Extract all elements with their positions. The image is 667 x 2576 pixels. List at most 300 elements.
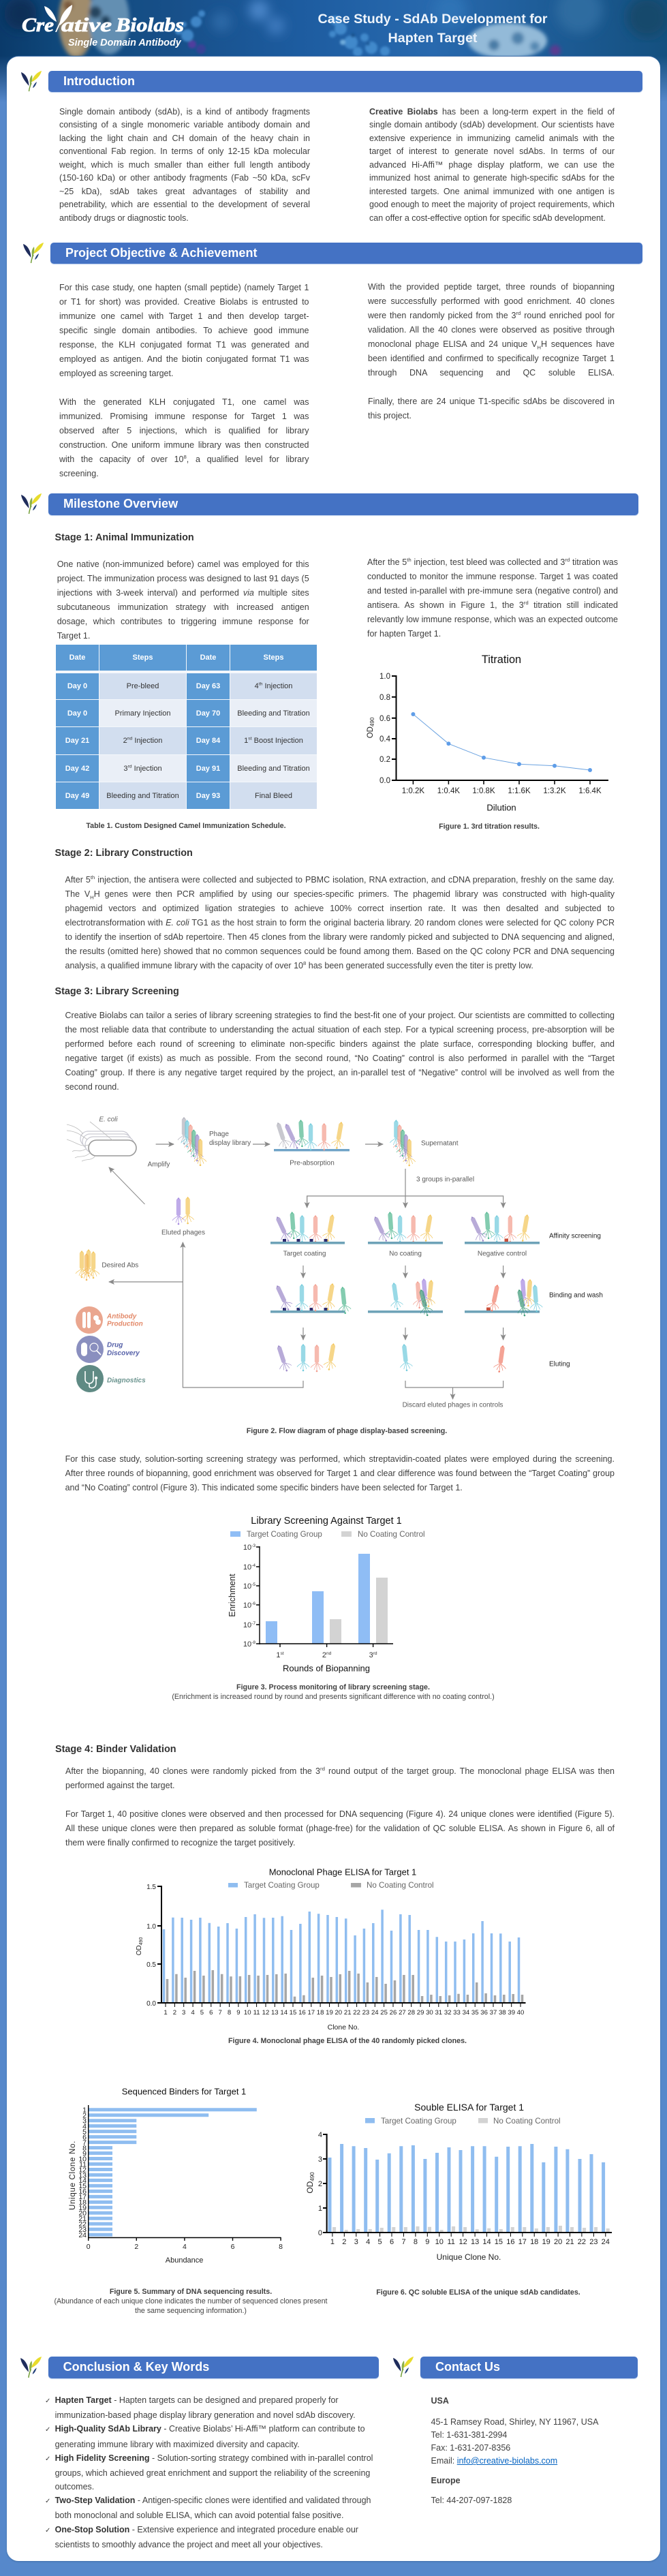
main title: Case Study - SdAb Development for [318,12,547,27]
chart: soluble ELISA: 13 [471,2238,479,2246]
text: objective left: specific single domain antibodies. To achieve good immune [59,326,309,335]
chart: soluble ELISA: 11 [447,2238,455,2246]
chart: monoclonal phage ELISA: 15 [290,2009,296,2017]
text: stage 1 left: dosage, which contributes to triggering immune response for [57,616,309,626]
text: contact details: Email: info@creative-biolabs.com [431,2456,557,2466]
chart: library screening enrichment: Target Coating Group [247,1530,322,1539]
text: introduction right: Creative Biolabs has been a long-term expert in the field of [369,107,615,117]
chart: titration line: 0.4 [379,735,391,743]
text: objective left: response, the KLH conjugated format T1 was generated and [59,339,309,349]
text: introduction left: lacking the light chain and CH domain of the heavy chain in [59,134,310,143]
chart: soluble ELISA: OD [305,2181,315,2194]
chart: sequenced binders: 13 [78,2171,87,2179]
heading: Contact Us: Contact Us [435,2360,500,2374]
table: immunization schedule: Day 21 [65,737,89,745]
chart: sequenced binders: 21 [78,2215,87,2223]
chart: monoclonal phage ELISA: 25 [380,2009,388,2017]
chart: monoclonal phage ELISA: 18 [317,2009,324,2017]
table: immunization schedule [56,645,317,809]
chart: monoclonal phage ELISA: 4 [191,2009,195,2017]
chart: soluble ELISA: 1 [318,2205,322,2213]
label: Phage display library: display library [209,1139,251,1147]
arrows: to binding and wash [303,1266,503,1278]
table: immunization schedule: 2nd Injection [123,736,162,745]
heading: Stage 4: Stage 4: Binder Validation [55,1744,176,1755]
heading: Milestone Overview: Milestone Overview [63,497,178,510]
phage stack: supernatant [390,1120,416,1166]
row: affinity screening plates [270,1211,540,1244]
text: introduction right: can offer a cost-effective option for specific sdAb development. [369,213,606,223]
table: immunization schedule: Date [69,654,85,662]
chart: monoclonal phage ELISA: 8 [228,2009,231,2017]
chart: soluble ELISA: 9 [425,2238,429,2246]
text: stage 1 right: conducted to monitor the immune response. Target 1 was coated [367,571,618,581]
chart: sequenced binders: 12 [78,2166,87,2174]
chart: soluble ELISA: 16 [506,2238,515,2246]
logo wordmark: ative [61,15,112,36]
logo wordmark: Cre [22,15,54,36]
labels: coating groups: Negative control [478,1250,527,1258]
text: objective right: were then randomly picked from the 3rd round enriched pool for [368,309,615,320]
chart: sequenced binders: 15 [78,2182,87,2190]
chart: monoclonal phage ELISA: 5 [200,2009,204,2017]
chart: titration line: 0.8 [379,694,390,702]
chart: soluble ELISA: 20 [554,2238,562,2246]
row: eluted phages by group [273,1342,509,1373]
list: conclusion key words: outcomes. [55,2482,94,2491]
chart: library screening enrichment: -6 [251,1601,255,1606]
chart: monoclonal phage ELISA: 38 [499,2009,506,2017]
text: objective right: through DNA sequencing and QC soluble ELISA. [368,368,615,378]
text: solution sorting: and “No Coating” control (Figure 3). This indicated some specific binders have been selected for Target 1. [65,1483,463,1492]
chart: monoclonal phage ELISA: 39 [508,2009,515,2017]
list: conclusion key words: High Fidelity Screening - Solution-sorting strategy combined with in-parallel control [55,2453,373,2463]
chart: monoclonal phage ELISA: 27 [399,2009,406,2017]
icon: leaf milestone [21,493,42,514]
chart: sequenced binders: 7 [82,2138,87,2147]
chart: titration line: 0.0 [379,777,390,785]
text: objective right: Finally, there are 24 unique T1-specific sdAbs be discovered in [368,397,615,406]
chart: monoclonal phage ELISA: 19 [326,2009,333,2017]
table: immunization schedule: Bleeding and Titration [237,709,310,717]
chart: soluble ELISA: 21 [565,2238,574,2246]
text: stage 4: them were finally confirmed to recognize the target positively. [65,1837,295,1847]
text: objective left: employed as antigen. And the biotin conjugated format T1 was [59,354,309,364]
chart: library screening enrichment: Enrichment [228,1574,237,1617]
chart: sequenced binders: 22 [78,2220,87,2228]
table: immunization schedule: Steps [264,654,283,662]
table: immunization schedule: Bleeding and Titration [237,765,310,773]
list: conclusion key words: ✓ [45,2426,50,2434]
text: objective left [59,282,309,478]
text: stage 3 [65,1010,615,1092]
text: stage 4: After the biopanning, 40 clones were randomly picked from the 3rd round output of the target group. The monoclonal phage ELISA was then [65,1765,615,1776]
text: objective left: or T1 for short) was provided. Creative Biolabs is entrusted to [59,297,309,307]
text: introduction left: antibody drugs or diagnostic tools. [59,213,189,223]
arrow: back to E. coli [109,1167,144,1204]
chart: library screening enrichment: 10 [243,1563,251,1571]
chart: monoclonal phage ELISA: 26 [390,2009,397,2017]
chart: monoclonal phage ELISA: 0.0 [146,2000,156,2008]
chart: soluble ELISA: 12 [459,2238,467,2246]
chart: monoclonal phage ELISA: 29 [417,2009,424,2017]
list: conclusion key words: both monoclonal and soluble ELISA, which can avoid potential false positive. [55,2511,343,2520]
chart: monoclonal phage ELISA: 490 [139,1937,144,1945]
text: stage 4: For Target 1, 40 positive clones were observed and then processed for DNA sequencing (Figure 4). 24 unique clones were identified (Figure 5). [65,1809,615,1818]
chart: monoclonal phage ELISA [136,1867,526,2031]
caption: figure 5: the same sequencing information.) [135,2307,247,2315]
text: introduction left: conventional Fab region. In terms of only 12-15 kDa molecular [59,147,310,156]
text: objective left: construction. One uniform immune library was then constructed [59,440,309,450]
text: objective right [368,282,615,420]
chart: library screening enrichment: nd [326,1651,332,1656]
chart: monoclonal phage ELISA: 10 [244,2009,251,2017]
chart: soluble ELISA: 10 [435,2238,444,2246]
chart: sequenced binders: 3 [82,2117,87,2125]
logo wordmark: Biolabs [115,15,184,36]
chart: library screening enrichment: -3 [251,1544,255,1548]
list: conclusion key words: One-Stop Solution - Extensive experience and integrated procedure enable our [55,2525,358,2534]
caption: table 1: Table 1. Custom Designed Camel Immunization Schedule. [86,822,286,830]
chart: sequenced binders: 24 [78,2231,87,2239]
chart: monoclonal phage ELISA: 9 [236,2009,241,2017]
heading: Project Objective & Achievement: Project Objective & Achievement [65,246,257,260]
chart: titration line [367,654,608,812]
text: introduction left: ~25 kDa), sdAb takes great advantages of stability and [59,187,310,196]
chart: soluble ELISA: 4 [318,2131,322,2139]
chart: monoclonal phage ELISA: 1.0 [146,1923,156,1931]
chart: monoclonal phage ELISA: 32 [444,2009,452,2017]
icon: drug discovery: Discovery [107,1349,140,1358]
chart: soluble ELISA: 0 [318,2229,322,2237]
table: immunization schedule: Day 70 [196,709,220,717]
icon: leaf conclusion [20,2357,42,2378]
text: stage 1 right: After the 5th injection, test bleed was collected and 3rd titration was [367,556,618,567]
chart: sequenced binders: Sequenced Binders for Target 1 [122,2087,246,2096]
caption: figure 6: Figure 6. QC soluble ELISA of the unique sdAb candidates. [376,2288,580,2297]
text: introduction right: target of interest to generate novel sdAbs. In terms of our [369,147,615,156]
chart: monoclonal phage ELISA: 13 [271,2009,279,2017]
icon: antibody production: Antibody [106,1313,137,1321]
chart: titration line: Dilution [486,803,516,812]
chart: monoclonal phage ELISA: No Coating Control [367,1881,434,1890]
heading: Contact Us [420,2357,638,2378]
labels: stage names: Binding and wash [549,1292,603,1299]
chart: library screening enrichment: Rounds of Biopanning [283,1663,370,1674]
chart: library screening enrichment: 3 [369,1651,373,1659]
chart: sequenced binders: 4 [183,2243,187,2251]
labels: stage names: Eluting [549,1360,570,1368]
text: contact details: 45-1 Ramsey Road, Shirley, NY 11967, USA [431,2417,598,2427]
chart: sequenced binders: 2 [134,2243,138,2251]
icon: drug discovery: Drug [107,1341,123,1349]
caption: figure 3: Figure 3. Process monitoring of library screening stage. [236,1683,430,1691]
chart: monoclonal phage ELISA: 0.5 [146,1961,156,1969]
chart: soluble ELISA: Souble ELISA for Target 1 [414,2102,524,2113]
text: objective left: For this case study, one hapten (small peptide) (namely Target 1 [59,282,309,292]
chart: soluble ELISA: 2 [318,2180,322,2188]
table: immunization schedule: Day 91 [196,765,220,773]
icon: drug discovery [76,1336,140,1363]
label: Supernatant: Supernatant [421,1139,459,1148]
text: stage 1 left [57,559,309,641]
chart: soluble ELISA: 1 [330,2238,335,2246]
text: stage 2: After 5th injection, the antisera were collected and subjected to PBMC isolation, RNA extraction, and cDNA preparation, freshly on the same day. [65,874,615,885]
list: conclusion key words: groups, which achieved great enrichment and support the reliability of the screening [55,2468,370,2478]
arrow: to pre-absorption [253,1144,270,1145]
chart: monoclonal phage ELISA: 17 [307,2009,315,2017]
chart: monoclonal phage ELISA: 1.5 [146,1884,156,1891]
logo wordmark [22,15,184,36]
label: Pre-absorption: Pre-absorption [290,1160,335,1167]
chart: sequenced binders: 18 [78,2198,87,2207]
desired antibodies: Desired Abs [102,1262,138,1269]
icon: leaf contact [393,2357,414,2377]
chart: monoclonal phage ELISA: 22 [353,2009,360,2017]
chart: sequenced binders: 11 [79,2160,87,2168]
labels: coating groups: No coating [389,1250,422,1258]
chart: soluble ELISA: 22 [578,2238,586,2246]
text: objective right: been identified and confirmed to specifically recognize Target 1 [368,353,615,363]
chart: sequenced binders: 14 [78,2177,87,2185]
chart: monoclonal phage ELISA: 11 [253,2009,260,2017]
chart: sequenced binders: 16 [78,2188,87,2196]
list: conclusion key words: ✓ [45,2527,50,2534]
text: contact details: Tel: 44-207-097-1828 [431,2496,512,2505]
chart: monoclonal phage ELISA: 33 [453,2009,461,2017]
table: immunization schedule: Pre-bleed [127,682,159,690]
chart: titration line: Titration [482,654,521,666]
table: immunization schedule: Day 63 [196,682,220,690]
text: objective left: immunized. Promising immune response for Target 1 was [59,412,309,421]
labels: coating groups: Target coating [283,1250,326,1258]
table: immunization schedule: Day 84 [196,737,220,745]
chart: library screening enrichment [228,1516,425,1674]
heading: Introduction: Introduction [63,74,135,88]
text: objective left: With the generated KLH conjugated T1, one camel was [59,397,309,406]
chart: monoclonal phage ELISA: 40 [517,2009,524,2017]
chart: soluble ELISA: 17 [518,2238,527,2246]
text: introduction right: extensive experience in immunizing camelid animals with the [369,134,615,143]
caption: figure 1: Figure 1. 3rd titration results. [439,823,540,831]
text: contact details [431,2396,598,2505]
chart: sequenced binders: Abundance [166,2256,203,2265]
chart: soluble ELISA: 18 [530,2238,538,2246]
chart: sequenced binders: 1 [82,2106,87,2114]
chart: soluble ELISA: 4 [366,2238,370,2246]
chart: soluble ELISA: 490 [309,2172,315,2181]
text: objective left: observed after 5 injections, which is qualified for library [59,425,309,435]
text: stage 1 right [367,556,618,638]
chart: soluble ELISA [305,2102,612,2262]
heading: Milestone Overview [48,493,638,515]
chart: titration line: 490 [369,717,375,726]
text: objective left: immunize one camel with Target 1 and then develop target- [59,311,309,320]
text: stage 1 left: One native (non-immunized before) camel was employed for this [57,559,309,568]
chart: monoclonal phage ELISA: 34 [463,2009,470,2017]
chart: titration line: 0.2 [379,756,390,764]
chart: soluble ELISA: 3 [318,2156,322,2164]
list: conclusion key words: ✓ [45,2397,50,2405]
chart: sequenced binders: 4 [82,2122,87,2130]
flow diagram: phage display screening [67,1116,603,1409]
arrows: to eluting [303,1328,503,1340]
text: solution sorting: After three rounds of biopanning, good enrichment was observed for Target 1 and clear difference was found between the “Target Coating” group [65,1468,615,1477]
caption: figure 5: (Abundance of each unique clone indicates the number of sequenced clones present [54,2297,328,2305]
icon: diagnostics [76,1365,146,1392]
heading: Project Objective & Achievement [50,243,642,264]
row: binding and wash plates [270,1278,543,1317]
chart: sequenced binders [69,2087,283,2265]
text: objective right: validation. All the 40 clones were observed as positive through [368,324,615,334]
text: stage 1 left: Target 1. [57,631,90,641]
icon: E. coli cell: E. coli [99,1116,118,1123]
chart: sequenced binders: 5 [82,2128,87,2136]
table: immunization schedule: Day 0 [67,682,87,690]
text: stage 1 left: project. The immunization process was designed to last 91 days (5 [57,574,309,583]
chart: monoclonal phage ELISA: 1 [164,2009,168,2017]
icon: diagnostics: Diagnostics [107,1377,146,1385]
chart: library screening enrichment: No Coating Control [358,1530,425,1539]
table: immunization schedule: Day 93 [196,792,220,800]
table: immunization schedule: 3rd Injection [123,764,162,773]
icon: antibody production: Production [107,1321,143,1328]
header banner background [0,0,667,98]
chart: titration line: 0.6 [379,715,390,723]
chart: monoclonal phage ELISA: Target Coating Group [244,1881,320,1890]
chart: library screening enrichment: 2 [322,1651,326,1659]
chart: library screening enrichment: rd [373,1651,377,1656]
labels: stage names [549,1232,603,1368]
chart: monoclonal phage ELISA: 3 [182,2009,185,2017]
chart: monoclonal phage ELISA: 14 [280,2009,288,2017]
chart: library screening enrichment: -8 [251,1640,255,1645]
text: objective left: screening. [59,469,99,478]
chart: library screening enrichment: -5 [251,1582,255,1587]
chart: monoclonal phage ELISA: 24 [371,2009,379,2017]
text: introduction left: Single domain antibody (sdAb), is a kind of antibody fragments [59,107,310,117]
text: stage 1 left: subcutaneous immunization strategy with increased antigen [57,602,309,612]
icon: leaf introduction [21,71,42,91]
list: conclusion key words [45,2395,373,2549]
list: conclusion key words: generating immune library with maximized diversity and capacity. [55,2440,300,2449]
chart: soluble ELISA: 15 [495,2238,503,2246]
text: stage 2: electrotransformation with E. coli TG1 as the host strain to form the original bacteria library. 20 random clones were selected for QC colony PCR [65,917,615,927]
arrows: three group branches [307,1169,503,1208]
chart: soluble ELISA: 7 [401,2238,406,2246]
text: stage 3: the most reliable data that contribute to understanding the actual situation of each step. For a typical screening process, pre-absorption will be [65,1025,615,1034]
chart: monoclonal phage ELISA: 37 [490,2009,497,2017]
table: immunization schedule: Primary Injection [115,709,170,717]
main title [318,12,548,46]
text: stage 3: second round. [65,1082,119,1092]
text: contact details: USA [431,2396,449,2406]
arrow: to phage library [156,1144,174,1145]
chart: sequenced binders: 17 [78,2193,87,2201]
text: stage 1 right: and tested in-parallel with pre-immune sera (negative control) and [367,586,618,596]
arrows: eluted feedback lines [109,1242,503,1399]
icon: E. coli cell [67,1116,136,1161]
chart: sequenced binders: 0 [87,2243,91,2251]
text: objective left: employed as screening target. [59,368,173,378]
list: conclusion key words: High-Quality SdAb Library - Creative Biolabs’ Hi-Affi™ platform can contribute to [55,2424,365,2434]
chart: monoclonal phage ELISA: 30 [426,2009,433,2017]
text: stage 1 right: for hapten Target 1. [367,628,441,638]
chart: sequenced binders: 2 [82,2111,87,2119]
chart: soluble ELISA: 23 [589,2238,598,2246]
list: conclusion key words: Two-Step Validation - Antigen-specific clones were identified and validated through [55,2496,371,2505]
desired antibodies [76,1249,138,1281]
text: introduction left: consisting of a single monomeric variable antibody domain and [59,120,310,129]
text: contact details: Tel: 1-631-381-2994 [431,2430,507,2440]
main title: Hapten Target [388,31,477,46]
chart: sequenced binders: 23 [78,2226,87,2234]
list: conclusion key words: scientists to smoothly advance the project and meet all your objectives. [55,2540,323,2549]
text: introduction right: advanced Hi-Affi™ phage display platform, we can use the [369,160,615,170]
table: immunization schedule: Day 49 [65,792,89,800]
chart: titration line: 1:3.2K [543,787,566,795]
list: conclusion key words: immunization-based phage display library generation and novel sdAb discovery. [55,2410,356,2420]
text: stage 1 right: relevantly low immune response, which was an expected outcome [367,615,618,624]
chart: titration line: 1:1.6K [508,787,531,795]
text: stage 4: All these unique clones were then prepared as soluble format (phage-free) for the validation of QC soluble ELISA. As shown in Figure 6, all of [65,1824,615,1833]
chart: titration line: 1:0.2K [402,787,424,795]
chart: monoclonal phage ELISA: 35 [471,2009,479,2017]
text: introduction left [59,107,310,223]
chart: titration line: 1:0.4K [437,787,460,795]
text: introduction right: good enough to meet the majority of project requirements, which [369,200,615,209]
text: stage 2: to identify the insertion of sdAb repertoire. Then 45 clones from the library were randomly picked and subjected to DNA sequencing and aligned, [65,932,615,942]
text: stage 2: phagemid vectors and optimized ligation strategies to achieve 100% correct insertion rate. It was then desalted and subjected to [65,904,615,913]
chart: monoclonal phage ELISA: Clone No. [328,2023,359,2031]
eluted phages: Eluted phages [161,1229,205,1236]
table: immunization schedule: 4th Injection [255,681,292,690]
table: immunization schedule: Final Bleed [255,792,292,800]
chart: titration line: OD [367,726,375,738]
text: stage 3: negative target (if exists) as much as possible. From the second round, “No Coating” control is also performed in parallel with the “Target [65,1054,615,1063]
chart: sequenced binders: 19 [78,2204,87,2212]
chart: library screening enrichment: 10 [243,1640,251,1649]
heading: Stage 2: Stage 2: Library Construction [55,848,193,859]
chart: monoclonal phage ELISA: Monoclonal Phage ELISA for Target 1 [269,1867,416,1877]
chart: monoclonal phage ELISA: 36 [480,2009,488,2017]
table: immunization schedule: 1st Boost Injection [244,736,303,745]
chart: library screening enrichment: 10 [243,1601,251,1610]
text: stage 4: performed against the target. [65,1780,175,1790]
text: introduction right: immunized host animal to generate high-specific sdAbs for the [369,173,615,183]
table: immunization schedule: Day 42 [65,765,89,773]
chart: monoclonal phage ELISA: 2 [173,2009,176,2017]
chart: sequenced binders: 10 [78,2155,87,2163]
chart: library screening enrichment: -4 [251,1563,255,1568]
caption: figure 2: Figure 2. Flow diagram of phage display-based screening. [247,1427,447,1435]
text: introduction right [369,107,615,223]
chart: soluble ELISA: 8 [414,2238,418,2246]
text: stage 2: the results (omitted here) showed that no common sequences could be found among them. Based on the QC colony PCR and DNA sequencing [65,946,615,955]
heading: Conclusion & Key Words: Conclusion & Key Words [63,2360,209,2374]
text: stage 3: performed before each round of screening to eliminate non-specific binders against the plate surface, corresponding blocking buffer, and [65,1039,615,1048]
chart: soluble ELISA: 19 [542,2238,550,2246]
chart: monoclonal phage ELISA: 20 [335,2009,342,2017]
caption: figure 3: (Enrichment is increased round by round and presents significant difference with no coating control.) [172,1693,495,1701]
logo feather mark [44,5,72,32]
phage stack: library [178,1117,206,1166]
chart: monoclonal phage ELISA: 31 [435,2009,442,2017]
chart: monoclonal phage ELISA: OD [136,1945,143,1955]
label: Phage display library: Phage [209,1131,229,1138]
chart: library screening enrichment: 10 [243,1621,251,1629]
chart: sequenced binders: 6 [82,2133,87,2141]
